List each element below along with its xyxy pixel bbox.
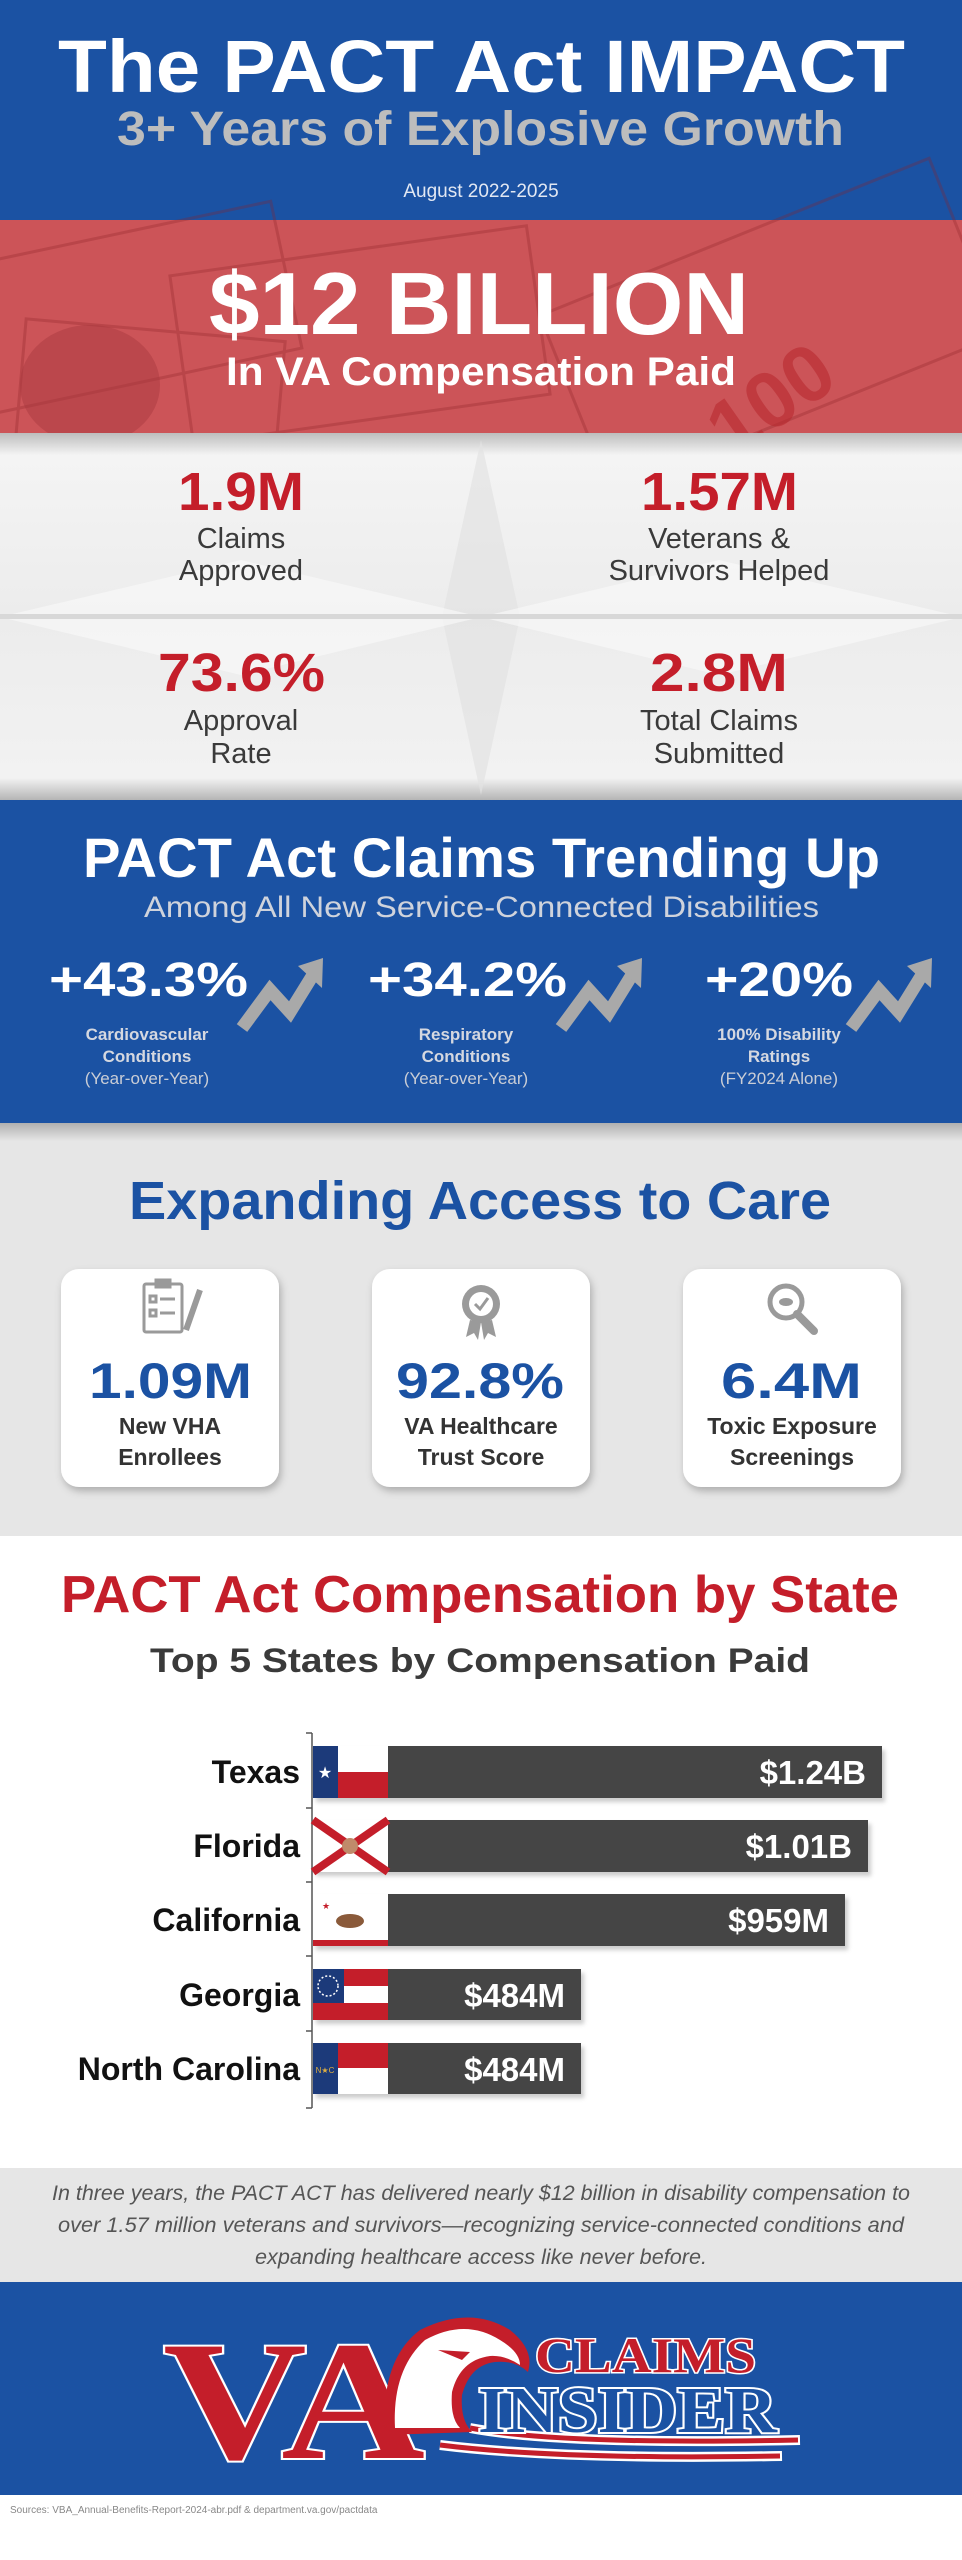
trend: respiratory bbox=[368, 954, 642, 1088]
trend: cardiovascular: +43.3% bbox=[49, 954, 248, 1007]
trend: respiratory: (Year-over-Year) bbox=[404, 1069, 528, 1088]
trend: 100% ratings: Ratings bbox=[748, 1047, 810, 1066]
bar: Texas: ★ bbox=[318, 1765, 332, 1782]
icon: award badge bbox=[462, 1285, 500, 1340]
card: screenings: Toxic Exposure bbox=[707, 1413, 877, 1439]
icon: clipboard bbox=[144, 1280, 200, 1332]
logo: VA Claims Insider bbox=[163, 2307, 800, 2495]
trend: cardiovascular bbox=[49, 954, 323, 1088]
card: VHA enrollees bbox=[61, 1269, 279, 1487]
sources: Sources: VBA_Annual-Benefits-Report-2024-abr.pdf & department.va.gov/pactdata bbox=[10, 2505, 378, 2516]
card: trust score: VA Healthcare bbox=[404, 1413, 558, 1439]
trend: 100% ratings: +20% bbox=[705, 954, 853, 1007]
stat: approval rate: Approval bbox=[184, 705, 298, 737]
bar: Georgia: $484M bbox=[464, 1977, 565, 2014]
stat: claims approved: Claims bbox=[197, 523, 285, 555]
stat: veterans helped: 1.57M bbox=[641, 462, 798, 522]
stat: claims approved bbox=[178, 462, 304, 587]
state subheading: Top 5 States by Compensation Paid bbox=[150, 1642, 810, 1680]
trending panel bbox=[0, 800, 962, 1123]
bar: Texas: Texas bbox=[212, 1754, 300, 1790]
state heading: PACT Act Compensation by State bbox=[61, 1566, 899, 1624]
stat: approval rate: 73.6% bbox=[158, 643, 325, 703]
bar: North Carolina: North Carolina bbox=[78, 2051, 300, 2087]
summary quote: expanding healthcare access like never before. bbox=[255, 2246, 707, 2269]
subtitle: 3+ Years of Explosive Growth bbox=[117, 103, 844, 156]
trend: cardiovascular: (Year-over-Year) bbox=[85, 1069, 209, 1088]
state compensation panel bbox=[61, 1566, 899, 2108]
bar: Georgia: Georgia bbox=[179, 1977, 300, 2013]
stat: total claims: Total Claims bbox=[640, 705, 798, 737]
bar: Florida bbox=[193, 1820, 868, 1872]
trend: 100% ratings: (FY2024 Alone) bbox=[720, 1069, 838, 1088]
bar chart bbox=[78, 1733, 882, 2108]
summary quote: over 1.57 million veterans and survivors—recognizing service-connected conditions and bbox=[58, 2214, 905, 2237]
card: trust score: Trust Score bbox=[418, 1444, 544, 1470]
bar: Florida: $1.01B bbox=[746, 1828, 852, 1865]
bar: California: $959M bbox=[728, 1902, 829, 1939]
trending title: PACT Act Claims Trending Up bbox=[83, 826, 880, 889]
trend: respiratory: +34.2% bbox=[368, 954, 567, 1007]
trend: respiratory: Conditions bbox=[422, 1047, 510, 1066]
card: trust score bbox=[372, 1269, 590, 1487]
stat: approval rate: Rate bbox=[210, 738, 272, 770]
trend: cardiovascular: Cardiovascular bbox=[86, 1025, 209, 1044]
stat: total claims: Submitted bbox=[654, 738, 784, 770]
trend: 100% ratings bbox=[705, 954, 932, 1088]
logo: VA Claims Insider: VA bbox=[163, 2307, 425, 2495]
stat: claims approved: 1.9M bbox=[178, 462, 304, 522]
card: screenings: Screenings bbox=[730, 1444, 854, 1470]
stat: veterans helped: Veterans & bbox=[648, 523, 790, 555]
icon: magnifier bbox=[770, 1286, 814, 1331]
summary quote: In three years, the PACT ACT has delivered nearly $12 billion in disability compensation to bbox=[52, 2182, 910, 2205]
banner subtitle: In VA Compensation Paid bbox=[226, 350, 736, 394]
summary quote bbox=[0, 2168, 962, 2282]
footer logo panel bbox=[0, 2282, 962, 2495]
logo: VA Claims Insider: INSIDER bbox=[478, 2374, 778, 2447]
bar: Texas: $1.24B bbox=[760, 1754, 866, 1791]
bar: Georgia bbox=[179, 1969, 581, 2020]
money banner: 100 bbox=[690, 325, 851, 474]
bar: California bbox=[152, 1894, 845, 1946]
bar: California: California bbox=[152, 1902, 300, 1938]
card: VHA enrollees: Enrollees bbox=[118, 1444, 222, 1470]
eagle head bbox=[384, 2318, 530, 2435]
card: trust score: 92.8% bbox=[396, 1353, 564, 1409]
stat: total claims: 2.8M bbox=[650, 643, 788, 703]
bar: Florida: Florida bbox=[193, 1828, 300, 1864]
money banner bbox=[0, 158, 962, 492]
trend: 100% ratings: 100% Disability bbox=[717, 1025, 841, 1044]
stat: veterans helped: Survivors Helped bbox=[609, 555, 829, 587]
stat: total claims bbox=[640, 643, 798, 770]
stat: approval rate bbox=[158, 643, 325, 770]
card: VHA enrollees: 1.09M bbox=[89, 1353, 252, 1409]
card: screenings: 6.4M bbox=[721, 1353, 862, 1409]
trend: cardiovascular: Conditions bbox=[103, 1047, 191, 1066]
stat: veterans helped bbox=[609, 462, 829, 587]
date: August 2022-2025 bbox=[403, 181, 559, 202]
bar: California: ★ bbox=[322, 1901, 330, 1911]
bar: North Carolina: N★C bbox=[316, 2066, 335, 2075]
stats grid panel bbox=[0, 433, 962, 800]
bar: Texas bbox=[212, 1746, 882, 1798]
stat: claims approved: Approved bbox=[179, 555, 303, 587]
trending subtitle: Among All New Service-Connected Disabilities bbox=[144, 891, 819, 924]
bar: North Carolina bbox=[78, 2043, 581, 2094]
big number: $12 BILLION bbox=[209, 254, 749, 353]
card: VHA enrollees: New VHA bbox=[119, 1413, 221, 1439]
title: The PACT Act IMPACT bbox=[58, 25, 905, 108]
bar: North Carolina: $484M bbox=[464, 2051, 565, 2088]
access to care panel bbox=[0, 1123, 962, 1536]
trend: respiratory: Respiratory bbox=[419, 1025, 514, 1044]
header panel bbox=[0, 0, 962, 220]
access heading: Expanding Access to Care bbox=[129, 1171, 831, 1231]
card: screenings bbox=[683, 1269, 901, 1487]
logo: VA Claims Insider: CLAIMS bbox=[535, 2327, 756, 2383]
